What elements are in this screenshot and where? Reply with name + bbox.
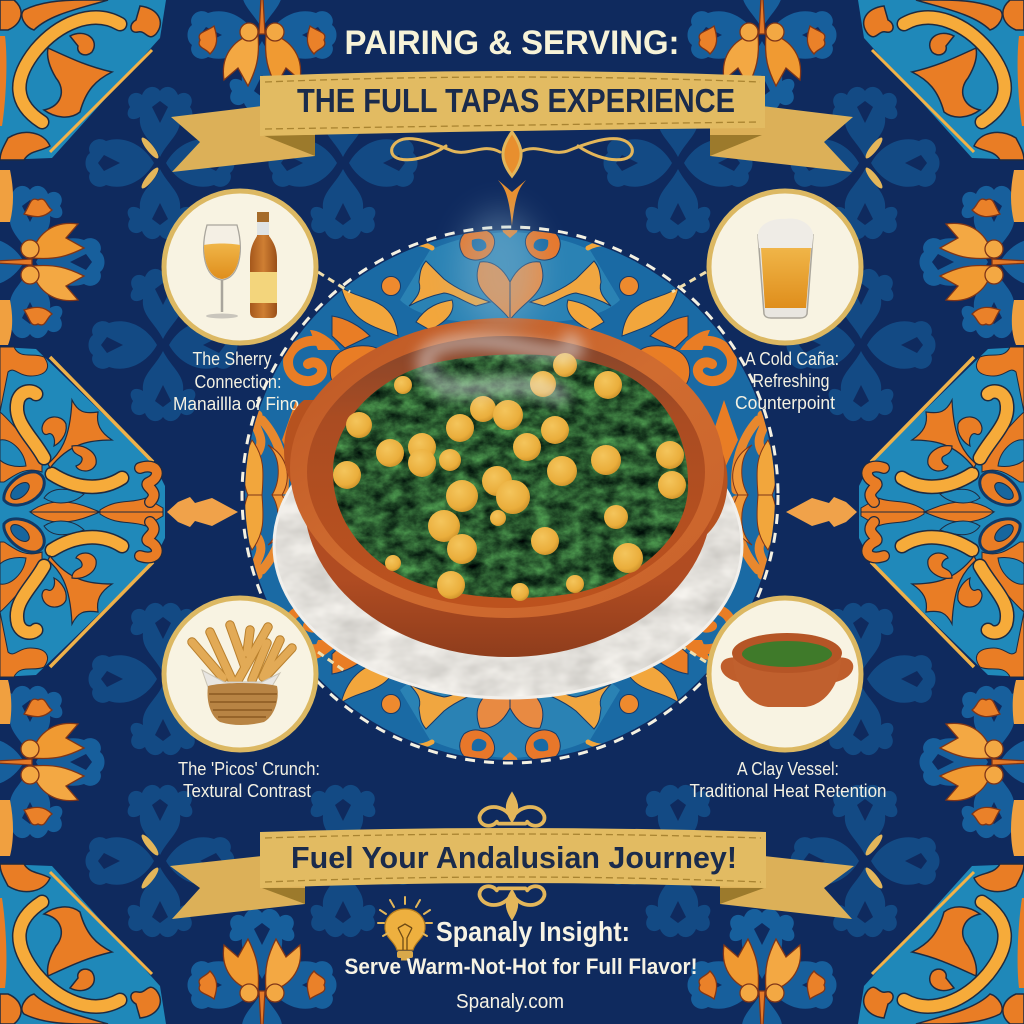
icon: sherry glass and bottle (164, 191, 316, 343)
ribbon banner: call to action (170, 828, 854, 919)
steam (425, 210, 576, 395)
label: picos: Textural Contrast (183, 780, 311, 801)
spinach (333, 354, 688, 598)
icon: light bulb (378, 897, 432, 959)
connector dashes (318, 272, 706, 672)
top flourish (392, 132, 632, 226)
banner text: Fuel Your Andalusian Journey! (291, 840, 737, 875)
label: clay: A Clay Vessel: (737, 758, 839, 779)
label: picos (178, 758, 320, 801)
label: cana: A Cold Caña: (745, 348, 839, 369)
label: clay (690, 758, 886, 801)
label: clay: Traditional Heat Retention (690, 780, 886, 801)
central rosette (244, 200, 776, 790)
label: picos: The 'Picos' Crunch: (178, 758, 320, 779)
ornaments around banner (480, 795, 544, 917)
title line: PAIRING & SERVING: (344, 24, 680, 62)
plate (274, 392, 742, 698)
damask background pattern (86, 87, 940, 937)
label: cana: Refreshing (752, 370, 830, 391)
label: cana (735, 348, 839, 413)
dashed ring (242, 227, 778, 763)
website: Spanaly.com (456, 991, 564, 1013)
bowl body (304, 343, 712, 657)
insight text: Serve Warm-Not-Hot for Full Flavor! (344, 954, 698, 979)
chickpeas (333, 353, 686, 601)
clay bowl with spinach and chickpeas (284, 318, 728, 657)
banner title: THE FULL TAPAS EXPERIENCE (297, 82, 735, 119)
icon: breadsticks basket (164, 598, 316, 750)
label: cana: Counterpoint (735, 392, 835, 413)
insight heading: Spanaly Insight: (436, 916, 630, 947)
bowl handles (284, 400, 728, 540)
gold leaf accents (139, 136, 885, 890)
icon: clay vessel (709, 598, 861, 750)
icon: beer glass (709, 191, 861, 343)
label: sherry: Connection: (194, 371, 282, 392)
top ribbon banner (171, 71, 853, 172)
label: sherry (173, 348, 299, 414)
label: sherry: Manaillla of Fino (173, 393, 299, 414)
side tiles (0, 170, 1024, 856)
label: sherry: The Sherry (192, 348, 272, 369)
